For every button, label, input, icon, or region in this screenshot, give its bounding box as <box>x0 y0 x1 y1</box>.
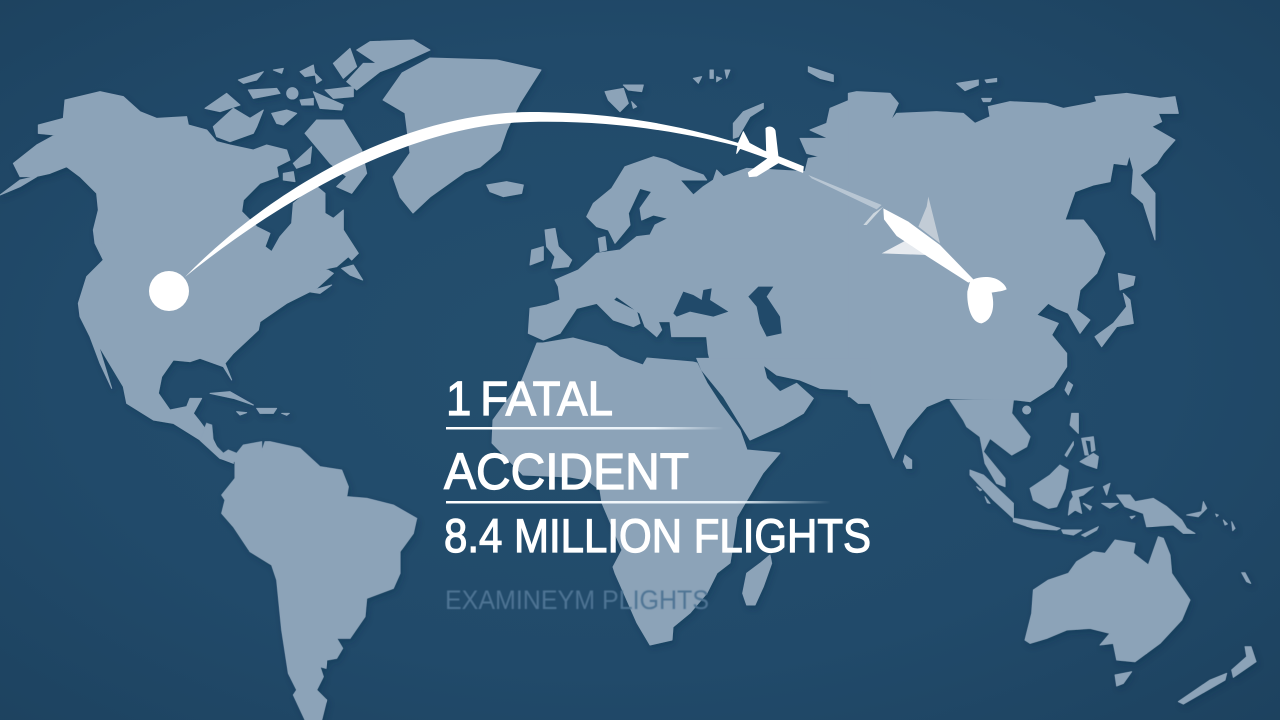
Indonesian islands <box>970 465 1118 537</box>
Iceland <box>487 182 523 197</box>
Indochina and Malay peninsula <box>950 400 1030 487</box>
icon: second airplane <box>863 197 974 283</box>
Greenland <box>383 58 541 213</box>
route trail <box>808 175 882 209</box>
New Zealand <box>1178 647 1256 704</box>
statistic text block <box>444 373 871 562</box>
Great Britain and Ireland <box>530 228 572 268</box>
Zealand and Mediterranean islands <box>598 237 607 252</box>
Southeast Asia and Oceania <box>950 400 1256 704</box>
headline line 3: 8.4 MILLION FLIGHTS <box>444 509 871 562</box>
airplanes and route trail <box>737 127 1007 323</box>
Philippines <box>1065 413 1098 468</box>
headline line 1: 1 FATAL <box>446 373 613 426</box>
Australia <box>1025 537 1190 662</box>
Japan <box>1095 273 1135 347</box>
Middle East and Arabia <box>697 358 870 605</box>
Svalbard and Arctic islands <box>605 67 833 138</box>
Madagascar <box>743 555 772 605</box>
destination marker <box>967 277 1007 323</box>
flight route arc <box>185 112 745 277</box>
Siberian Arctic islands <box>957 78 997 102</box>
inland seas <box>673 287 782 337</box>
icon: first airplane <box>737 127 803 177</box>
North America <box>0 40 430 463</box>
faded caption: EXAMINEYM PLIGHTS <box>445 585 709 615</box>
South America <box>200 423 417 720</box>
headline line 2: ACCIDENT <box>444 443 689 500</box>
Europe and northern Asia <box>487 67 850 360</box>
Africa <box>492 338 780 645</box>
Caribbean islands <box>210 392 289 415</box>
New Guinea and Pacific islands <box>1117 495 1251 583</box>
Canadian Arctic islands <box>97 40 430 293</box>
Black Sea <box>673 288 728 317</box>
divider lines <box>446 427 724 430</box>
Asia <box>848 78 1178 468</box>
Tasmania <box>1115 672 1132 686</box>
Sri Lanka, Taiwan and Hainan <box>903 382 1073 468</box>
Caspian Sea <box>748 287 782 337</box>
origin marker <box>149 271 189 311</box>
